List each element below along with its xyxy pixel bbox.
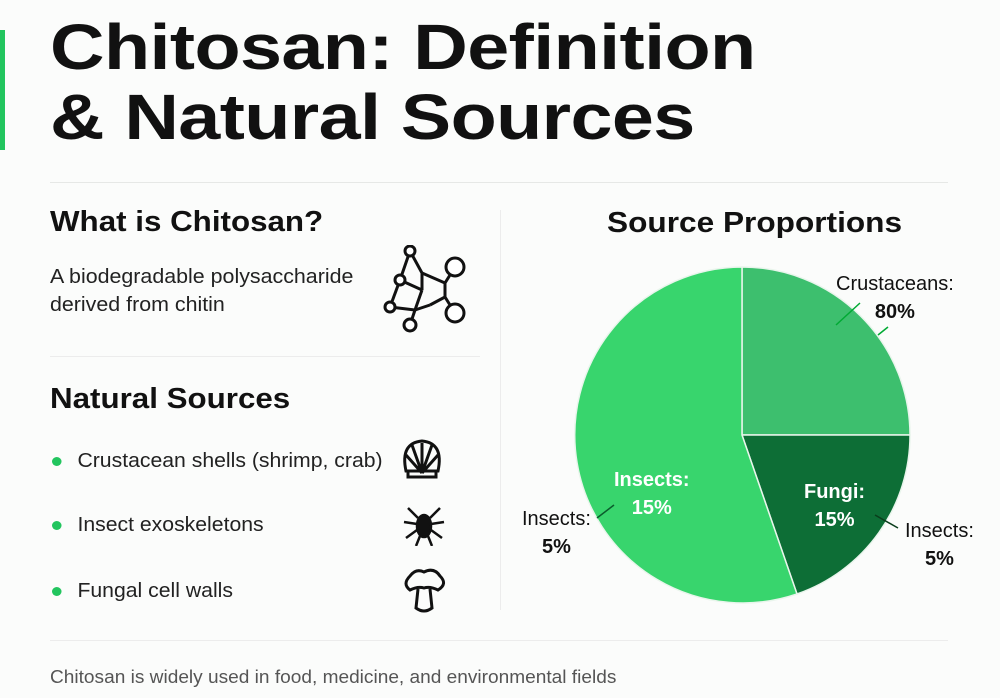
definition text — [50, 266, 353, 316]
label: fungi: Fungi: — [804, 481, 865, 503]
label: fungi: 15% — [815, 509, 855, 531]
title — [50, 11, 756, 153]
label: insects inside — [614, 469, 690, 519]
icon: shell — [403, 440, 441, 478]
label: insects inside: 15% — [632, 497, 672, 519]
definition text: derived from chitin — [50, 294, 225, 316]
label: fungi — [804, 481, 865, 531]
label: insects inside: Insects: — [614, 469, 690, 491]
label: insects left — [522, 508, 591, 558]
title: Chitosan: Definition — [50, 11, 756, 83]
label: crustaceans — [836, 273, 954, 323]
accent bar — [0, 30, 5, 150]
label: insects right: Insects: — [905, 520, 974, 542]
label: crustaceans: Crustaceans: — [836, 273, 954, 295]
footer: Chitosan is widely used in food, medicine, and environmental fields — [50, 667, 616, 687]
label: insects right: 5% — [925, 548, 954, 570]
label: insects right — [905, 520, 974, 570]
heading: what is chitosan: What is Chitosan? — [50, 206, 323, 238]
title: & Natural Sources — [50, 81, 695, 153]
heading: source proportions: Source Proportions — [607, 207, 902, 239]
icon: insect — [404, 507, 444, 546]
label: insects left: Insects: — [522, 508, 591, 530]
heading: natural sources: Natural Sources — [50, 383, 290, 415]
icon: molecule — [384, 245, 466, 332]
list item: fungal: Fungal cell walls — [77, 580, 233, 602]
definition text: A biodegradable polysaccharide — [50, 266, 353, 288]
label: crustaceans: 80% — [875, 301, 915, 323]
label: insects left: 5% — [542, 536, 571, 558]
list item: insect: Insect exoskeletons — [77, 514, 264, 536]
icon: mushroom — [404, 568, 446, 612]
list item: crustacean: Crustacean shells (shrimp, crab) — [77, 450, 383, 472]
